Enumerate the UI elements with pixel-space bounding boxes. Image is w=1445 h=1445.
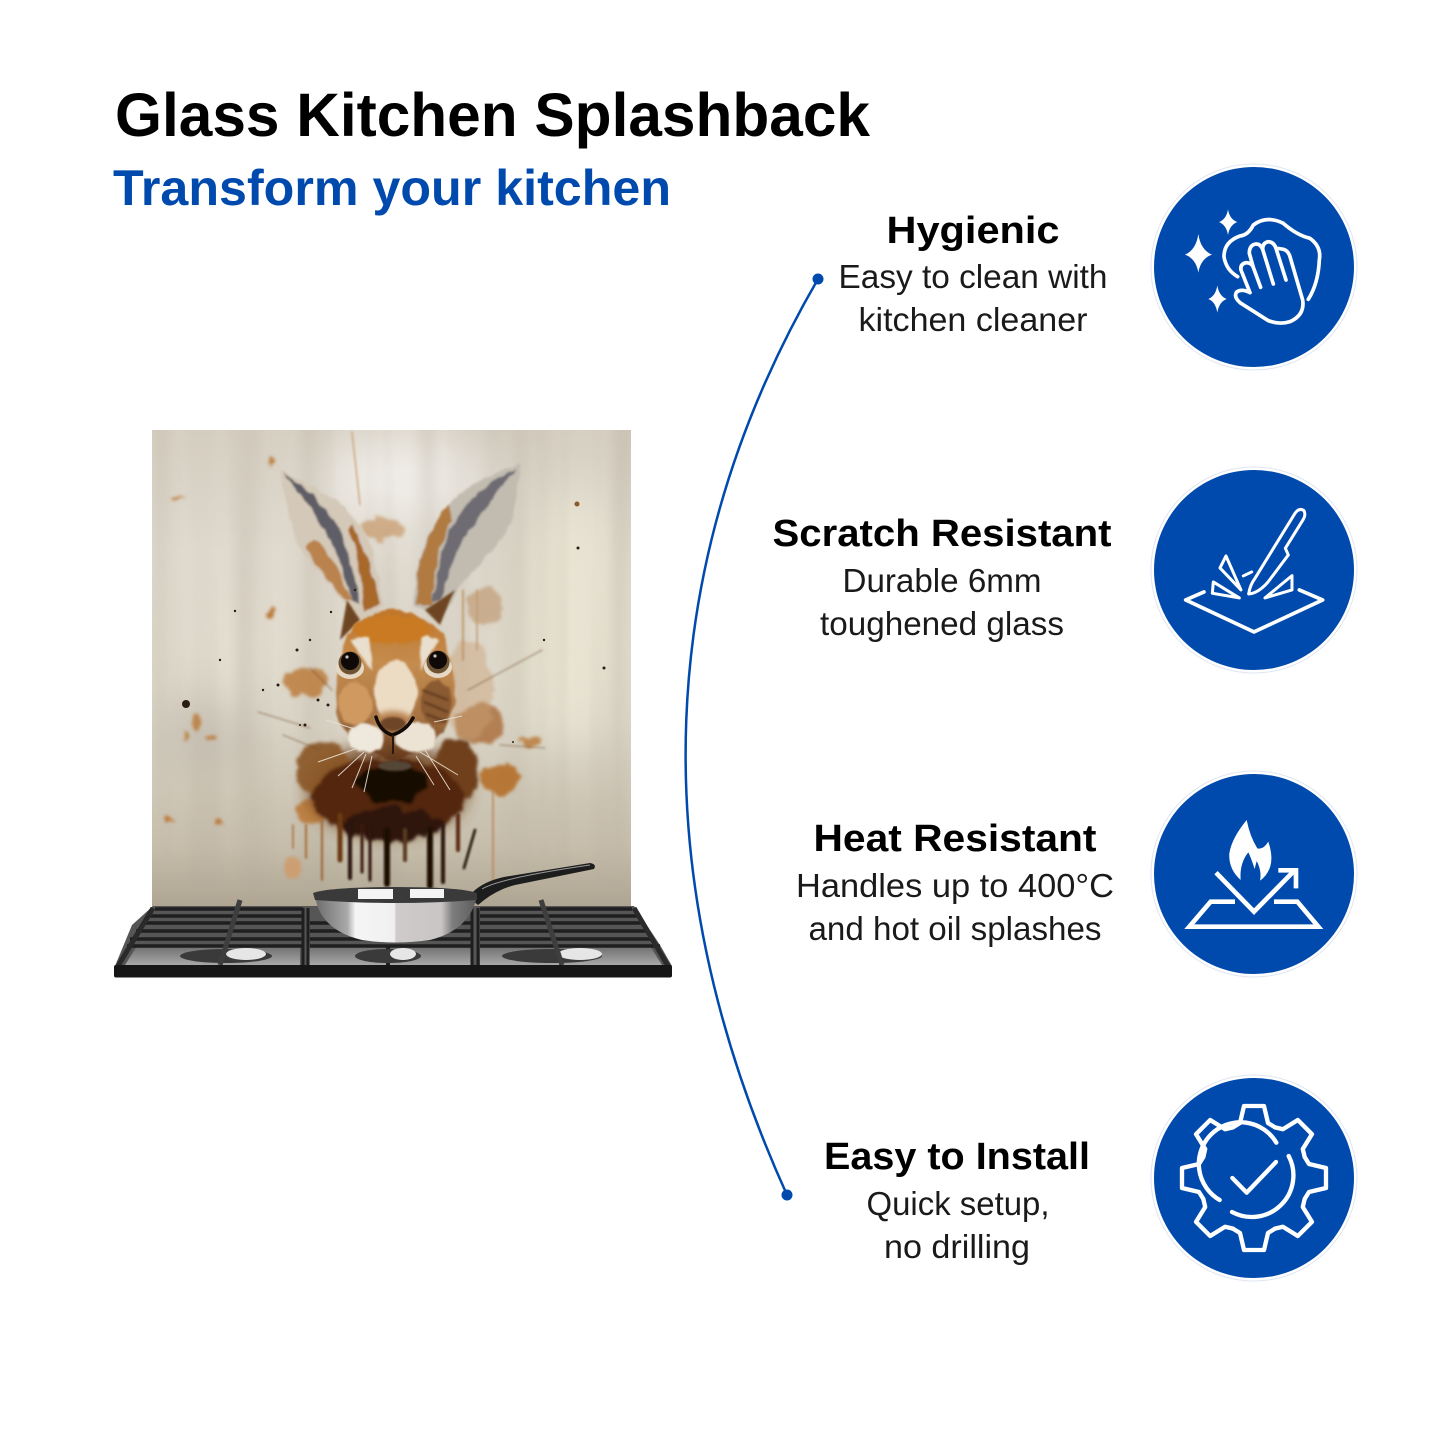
product image: splashback with hob and pan	[114, 430, 672, 978]
ear: left	[280, 471, 384, 626]
icon: gear with check mark	[1151, 1075, 1357, 1281]
steel tray	[125, 946, 662, 965]
feature: hygienic text: Easy to clean with	[838, 258, 1108, 295]
pan handle	[468, 863, 595, 905]
feature: heat resistant text: and hot oil splashes	[808, 910, 1102, 947]
panel: hare splashback artwork	[150, 430, 631, 920]
feature: easy to install text	[824, 1136, 1090, 1265]
feature: scratch resistant text: Durable 6mm	[842, 562, 1042, 599]
spatter dots	[182, 546, 606, 743]
icon: hand wiping with sparkles	[1151, 164, 1357, 370]
feature: easy to install text: Quick setup,	[866, 1185, 1050, 1222]
subtitle: Transform your kitchen	[113, 160, 671, 216]
icon: knife scratching glass	[1151, 467, 1357, 673]
title: Glass Kitchen Splashback	[115, 81, 870, 149]
feature: hygienic text	[838, 210, 1108, 338]
feature: scratch resistant text: toughened glass	[820, 605, 1064, 642]
chest: dark dripping paint	[258, 432, 545, 886]
whiskers	[318, 716, 462, 792]
paint splashes	[166, 456, 540, 878]
ear: right	[414, 464, 520, 615]
paint drips	[258, 432, 545, 886]
feature: heat resistant text: Heat Resistant	[814, 818, 1097, 860]
hare mouth	[378, 761, 412, 771]
feature: easy to install text: no drilling	[884, 1228, 1030, 1265]
icon: flame over glass	[1151, 771, 1357, 977]
feature: heat resistant text: Handles up to 400°C	[796, 867, 1114, 904]
feature: hygienic text: kitchen cleaner	[858, 301, 1088, 338]
feature: scratch resistant text: Scratch Resistant	[772, 513, 1112, 555]
feature: hygienic text: Hygienic	[886, 210, 1060, 252]
hare nose	[376, 717, 413, 754]
burners	[180, 900, 602, 965]
feature: easy to install text: Easy to Install	[824, 1136, 1090, 1178]
gas hob	[114, 900, 672, 978]
feature: heat resistant text	[796, 818, 1114, 947]
hob front edge	[114, 965, 672, 978]
feature: scratch resistant text	[772, 513, 1112, 642]
pan rim	[313, 887, 477, 903]
frying pan	[313, 863, 595, 942]
grate bars	[118, 908, 668, 966]
hare eyes	[336, 650, 452, 679]
pan body	[315, 896, 477, 942]
hob body	[115, 906, 672, 966]
hare head	[318, 590, 462, 792]
connector curve with end dots	[686, 274, 824, 1200]
